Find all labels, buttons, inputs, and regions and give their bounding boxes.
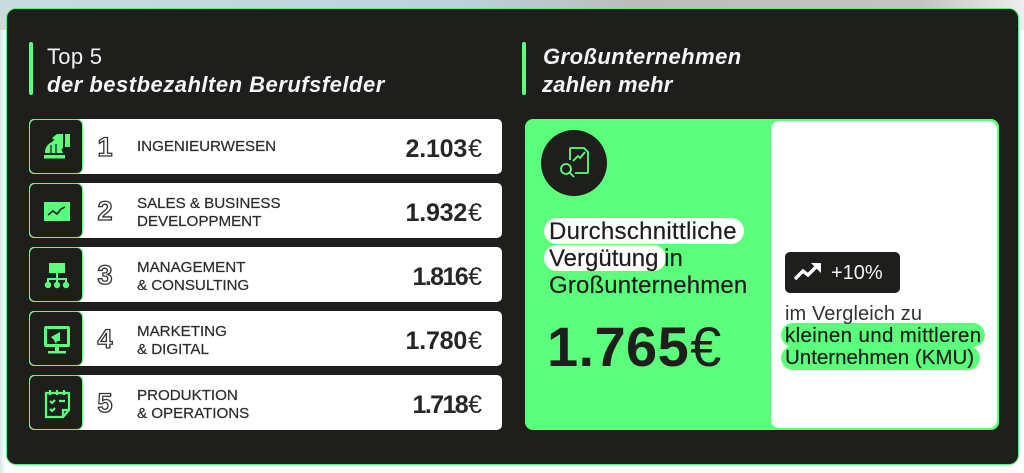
label [137, 259, 249, 294]
row 2: Sales [29, 183, 502, 238]
highlight: Vergütung [544, 245, 666, 271]
panel: white comparison [771, 121, 997, 428]
icon: engineering helmet [29, 119, 83, 174]
rank 4: 4 [97, 324, 113, 354]
label: PRODUKTION [137, 387, 238, 404]
icon: report with magnifier [541, 130, 607, 196]
value: +10% [831, 262, 883, 284]
salary: € [468, 391, 482, 419]
icon: chart [29, 183, 83, 238]
row 1: Ingenieurwesen [29, 119, 502, 174]
icon: trend arrow [794, 263, 821, 280]
highlight: KMU line 2 [781, 346, 980, 370]
rank 3: 3 [97, 260, 113, 290]
heading: right [522, 42, 742, 97]
text: average pay label: Vergütung in [549, 245, 683, 272]
label [137, 323, 227, 358]
label: & DIGITAL [137, 341, 209, 358]
label: DEVELOPPMENT [137, 213, 261, 230]
rank 2: 2 [97, 196, 113, 226]
value: 1.765 euro: 1.765€ [547, 315, 722, 378]
label [137, 387, 249, 422]
label: MARKETING [137, 323, 227, 340]
icon: monitor [29, 311, 83, 366]
label [137, 195, 281, 230]
icon: org chart [29, 247, 83, 302]
label: INGENIEURWESEN [137, 138, 276, 155]
heading: right: Großunternehmen [543, 44, 742, 69]
text: comparison: kleinen und mittleren [785, 324, 982, 347]
row 5: Produktion [29, 375, 502, 430]
panel: green average salary [525, 119, 999, 430]
salary: € [468, 199, 482, 227]
text: average pay label: Großunternehmen [549, 272, 747, 299]
rank 1: 1 [97, 132, 113, 162]
label: & OPERATIONS [137, 405, 249, 422]
text: comparison: Unternehmen (KMU) [785, 346, 974, 369]
label: SALES & BUSINESS [137, 195, 281, 212]
label: & CONSULTING [137, 277, 249, 294]
text: average pay label: Durchschnittliche [549, 218, 737, 245]
heading: left: der bestbezahlten Berufsfelder [47, 72, 385, 97]
text: comparison: im Vergleich zu [785, 303, 922, 325]
icon: checklist [29, 375, 83, 430]
salary: € [468, 327, 482, 355]
salary: 1.780 [406, 327, 467, 355]
text: average pay label [549, 218, 747, 299]
badge: +10% [785, 252, 900, 293]
salary: 1.718 [413, 391, 467, 419]
highlight: Durchschnittliche [544, 218, 744, 244]
salary: 1.816 [413, 263, 467, 291]
salary: 2.103 [406, 135, 467, 163]
salary: € [468, 263, 482, 291]
heading: right: zahlen mehr [542, 72, 673, 97]
salary: € [468, 135, 482, 163]
label: MANAGEMENT [137, 259, 245, 276]
highlight: KMU line 1 [781, 323, 985, 347]
salary: 1.932 [406, 199, 467, 227]
rank 5: 5 [97, 388, 113, 418]
heading: left: Top 5 [47, 44, 102, 69]
text: comparison [785, 303, 982, 369]
heading: left [29, 42, 386, 97]
row 3: Management [29, 247, 502, 302]
row 4: Marketing [29, 311, 502, 366]
